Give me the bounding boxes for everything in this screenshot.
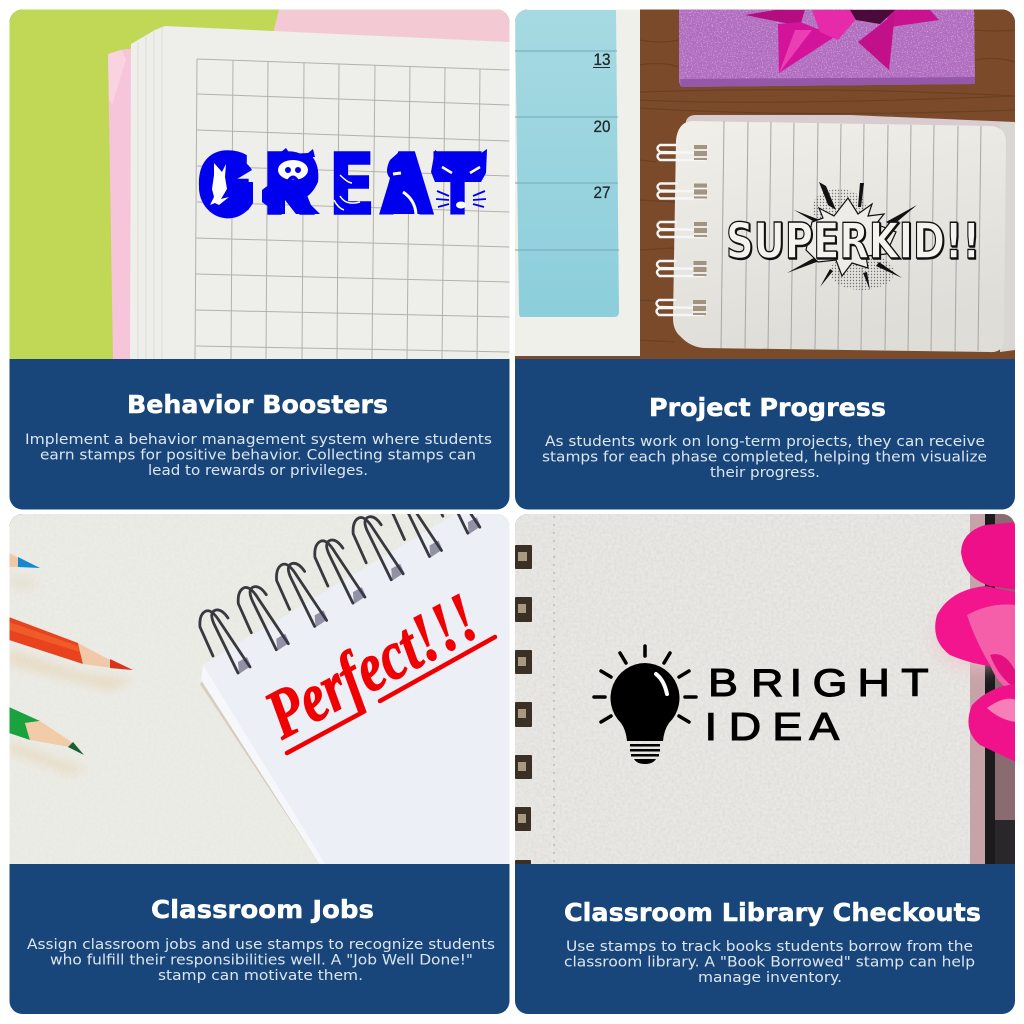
description: As students work on long-term projects, they can receive xyxy=(545,433,985,450)
description: Implement a behavior management system where students xyxy=(25,431,492,448)
description: classroom library. A "Book Borrowed" stamp can help xyxy=(564,954,975,970)
description: stamp can motivate them. xyxy=(158,967,363,984)
spiral holes xyxy=(515,545,532,868)
description: lead to rewards or privileges. xyxy=(148,462,368,479)
panel: Behavior Boosters xyxy=(9,9,510,510)
photo: grid notebook on green and pink xyxy=(9,9,510,360)
calendar: 20 xyxy=(594,117,610,136)
book edge xyxy=(970,514,1015,865)
spiral pad xyxy=(198,514,510,864)
photo: spiral notepad, calendar and gift on wood xyxy=(510,5,1016,360)
stamp: BRIGHT IDEA wordmark xyxy=(705,661,929,748)
stamp: SUPERKID comic burst xyxy=(726,182,980,290)
photo: textured paper notebook with flower xyxy=(515,514,1016,868)
description: stamps for each phase completed, helping them visualize xyxy=(542,448,987,466)
description: Assign classroom jobs and use stamps to recognize students xyxy=(27,936,495,953)
stamp: BRIGHT IDEA wordmark: IDEA xyxy=(705,705,839,748)
description: their progress. xyxy=(710,464,820,481)
heading: Classroom Jobs xyxy=(151,895,374,924)
heading: Project Progress xyxy=(649,393,886,422)
panel: Project Progress xyxy=(510,5,1016,510)
description xyxy=(25,431,492,479)
stamp: lightbulb icon xyxy=(594,646,696,764)
heading: Behavior Boosters xyxy=(127,390,388,419)
flower xyxy=(935,522,1016,762)
photo: spiral pad and coloured pencils xyxy=(10,514,510,864)
gift box with bow xyxy=(679,9,975,87)
panel: Classroom Library Checkouts xyxy=(515,514,1016,1014)
stamp: GREAT animal letters: GREAT xyxy=(196,136,481,235)
description: who fulfill their responsibilities well. A "Job Well Done!" xyxy=(50,952,473,968)
stamp: Perfect!!! xyxy=(265,593,498,756)
description: earn stamps for positive behavior. Collecting stamps can xyxy=(40,446,476,464)
card background xyxy=(515,10,1015,510)
stamp: BRIGHT IDEA wordmark: BRIGHT xyxy=(708,661,929,704)
card background xyxy=(10,514,510,1014)
description xyxy=(542,433,987,481)
pencils xyxy=(9,553,135,775)
card background xyxy=(10,10,510,510)
description xyxy=(27,936,495,984)
description: manage inventory. xyxy=(698,969,842,986)
card background xyxy=(515,514,1015,1014)
calendar xyxy=(510,5,640,356)
spiral notepad xyxy=(656,115,1015,352)
heading: Classroom Library Checkouts xyxy=(564,898,981,927)
description: Use stamps to track books students borrow from the xyxy=(566,938,973,955)
calendar: 27 xyxy=(594,183,610,202)
panel: Classroom Jobs xyxy=(9,470,515,1014)
description xyxy=(564,938,975,986)
stamp: Perfect!!!: Perfect!!! xyxy=(253,579,491,754)
calendar: 13 xyxy=(594,50,610,69)
